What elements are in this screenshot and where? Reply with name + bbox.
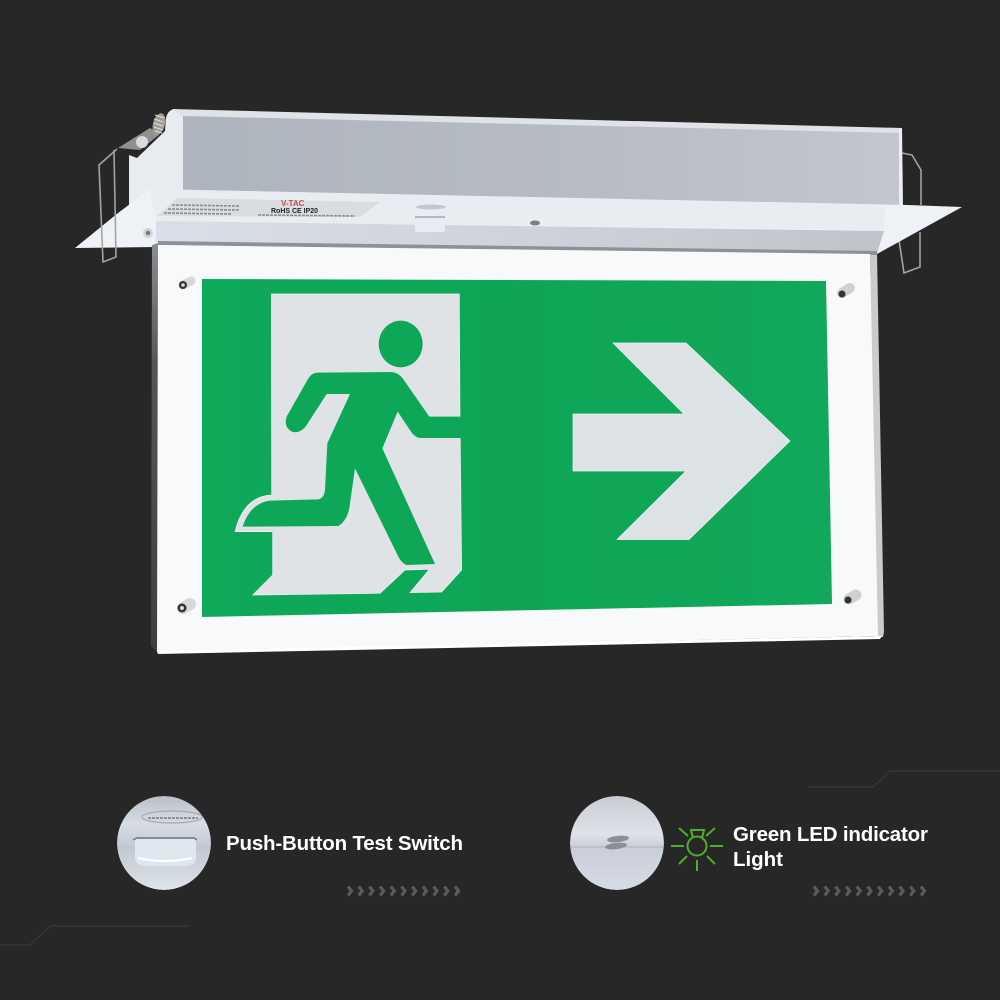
- flange front lip: [156, 221, 884, 253]
- icon: green bulb: [671, 828, 723, 871]
- test button on housing: [415, 204, 446, 232]
- decorative corner line: bottom left: [0, 926, 190, 945]
- sticker label: V-TAC: [281, 199, 305, 208]
- screw: top right: [838, 288, 850, 298]
- photo: indicator: [570, 796, 664, 890]
- feature: green LED indicator light: [570, 796, 934, 896]
- sign bottom edge: [157, 636, 882, 654]
- left wire clip: [99, 149, 117, 262]
- label: Light: [733, 848, 783, 871]
- screw: top left: [179, 281, 191, 289]
- left glass edge: [151, 243, 158, 652]
- sticker label: [157, 198, 380, 217]
- screw: bottom left: [178, 604, 190, 612]
- flange upper surface: [150, 189, 885, 230]
- exit sign luminaire: [75, 109, 962, 654]
- housing top edge: [172, 109, 902, 134]
- feature: push-button test switch: [117, 796, 463, 896]
- mounting screws: [178, 281, 856, 612]
- spring and bracket: [118, 112, 168, 150]
- housing front face: [183, 116, 902, 207]
- screw: bottom right: [844, 595, 856, 604]
- label: Push-Button Test Switch: [226, 832, 463, 855]
- chevron row: [348, 886, 458, 896]
- label: Green LED indicator: [733, 823, 928, 846]
- green sign panel: [202, 279, 832, 617]
- sticker label: RoHS CE IP20: [271, 208, 318, 215]
- photo: push button: [117, 796, 211, 890]
- right glass edge: [870, 252, 884, 637]
- flange screw: [143, 228, 153, 238]
- shadow line under lip: [158, 241, 877, 255]
- housing side: [129, 109, 190, 225]
- decorative corner line: right: [808, 771, 1000, 787]
- indicator hole on housing: [530, 220, 540, 226]
- right wire clip: [899, 153, 921, 273]
- running figure: [243, 321, 462, 565]
- housing right edge: [899, 128, 903, 207]
- flange: [75, 189, 962, 254]
- sign white panel: [157, 245, 878, 652]
- chevron row: [814, 886, 924, 896]
- exit door: [235, 294, 462, 595]
- body: [243, 372, 462, 565]
- head: [379, 321, 423, 367]
- direction arrow: [573, 343, 790, 540]
